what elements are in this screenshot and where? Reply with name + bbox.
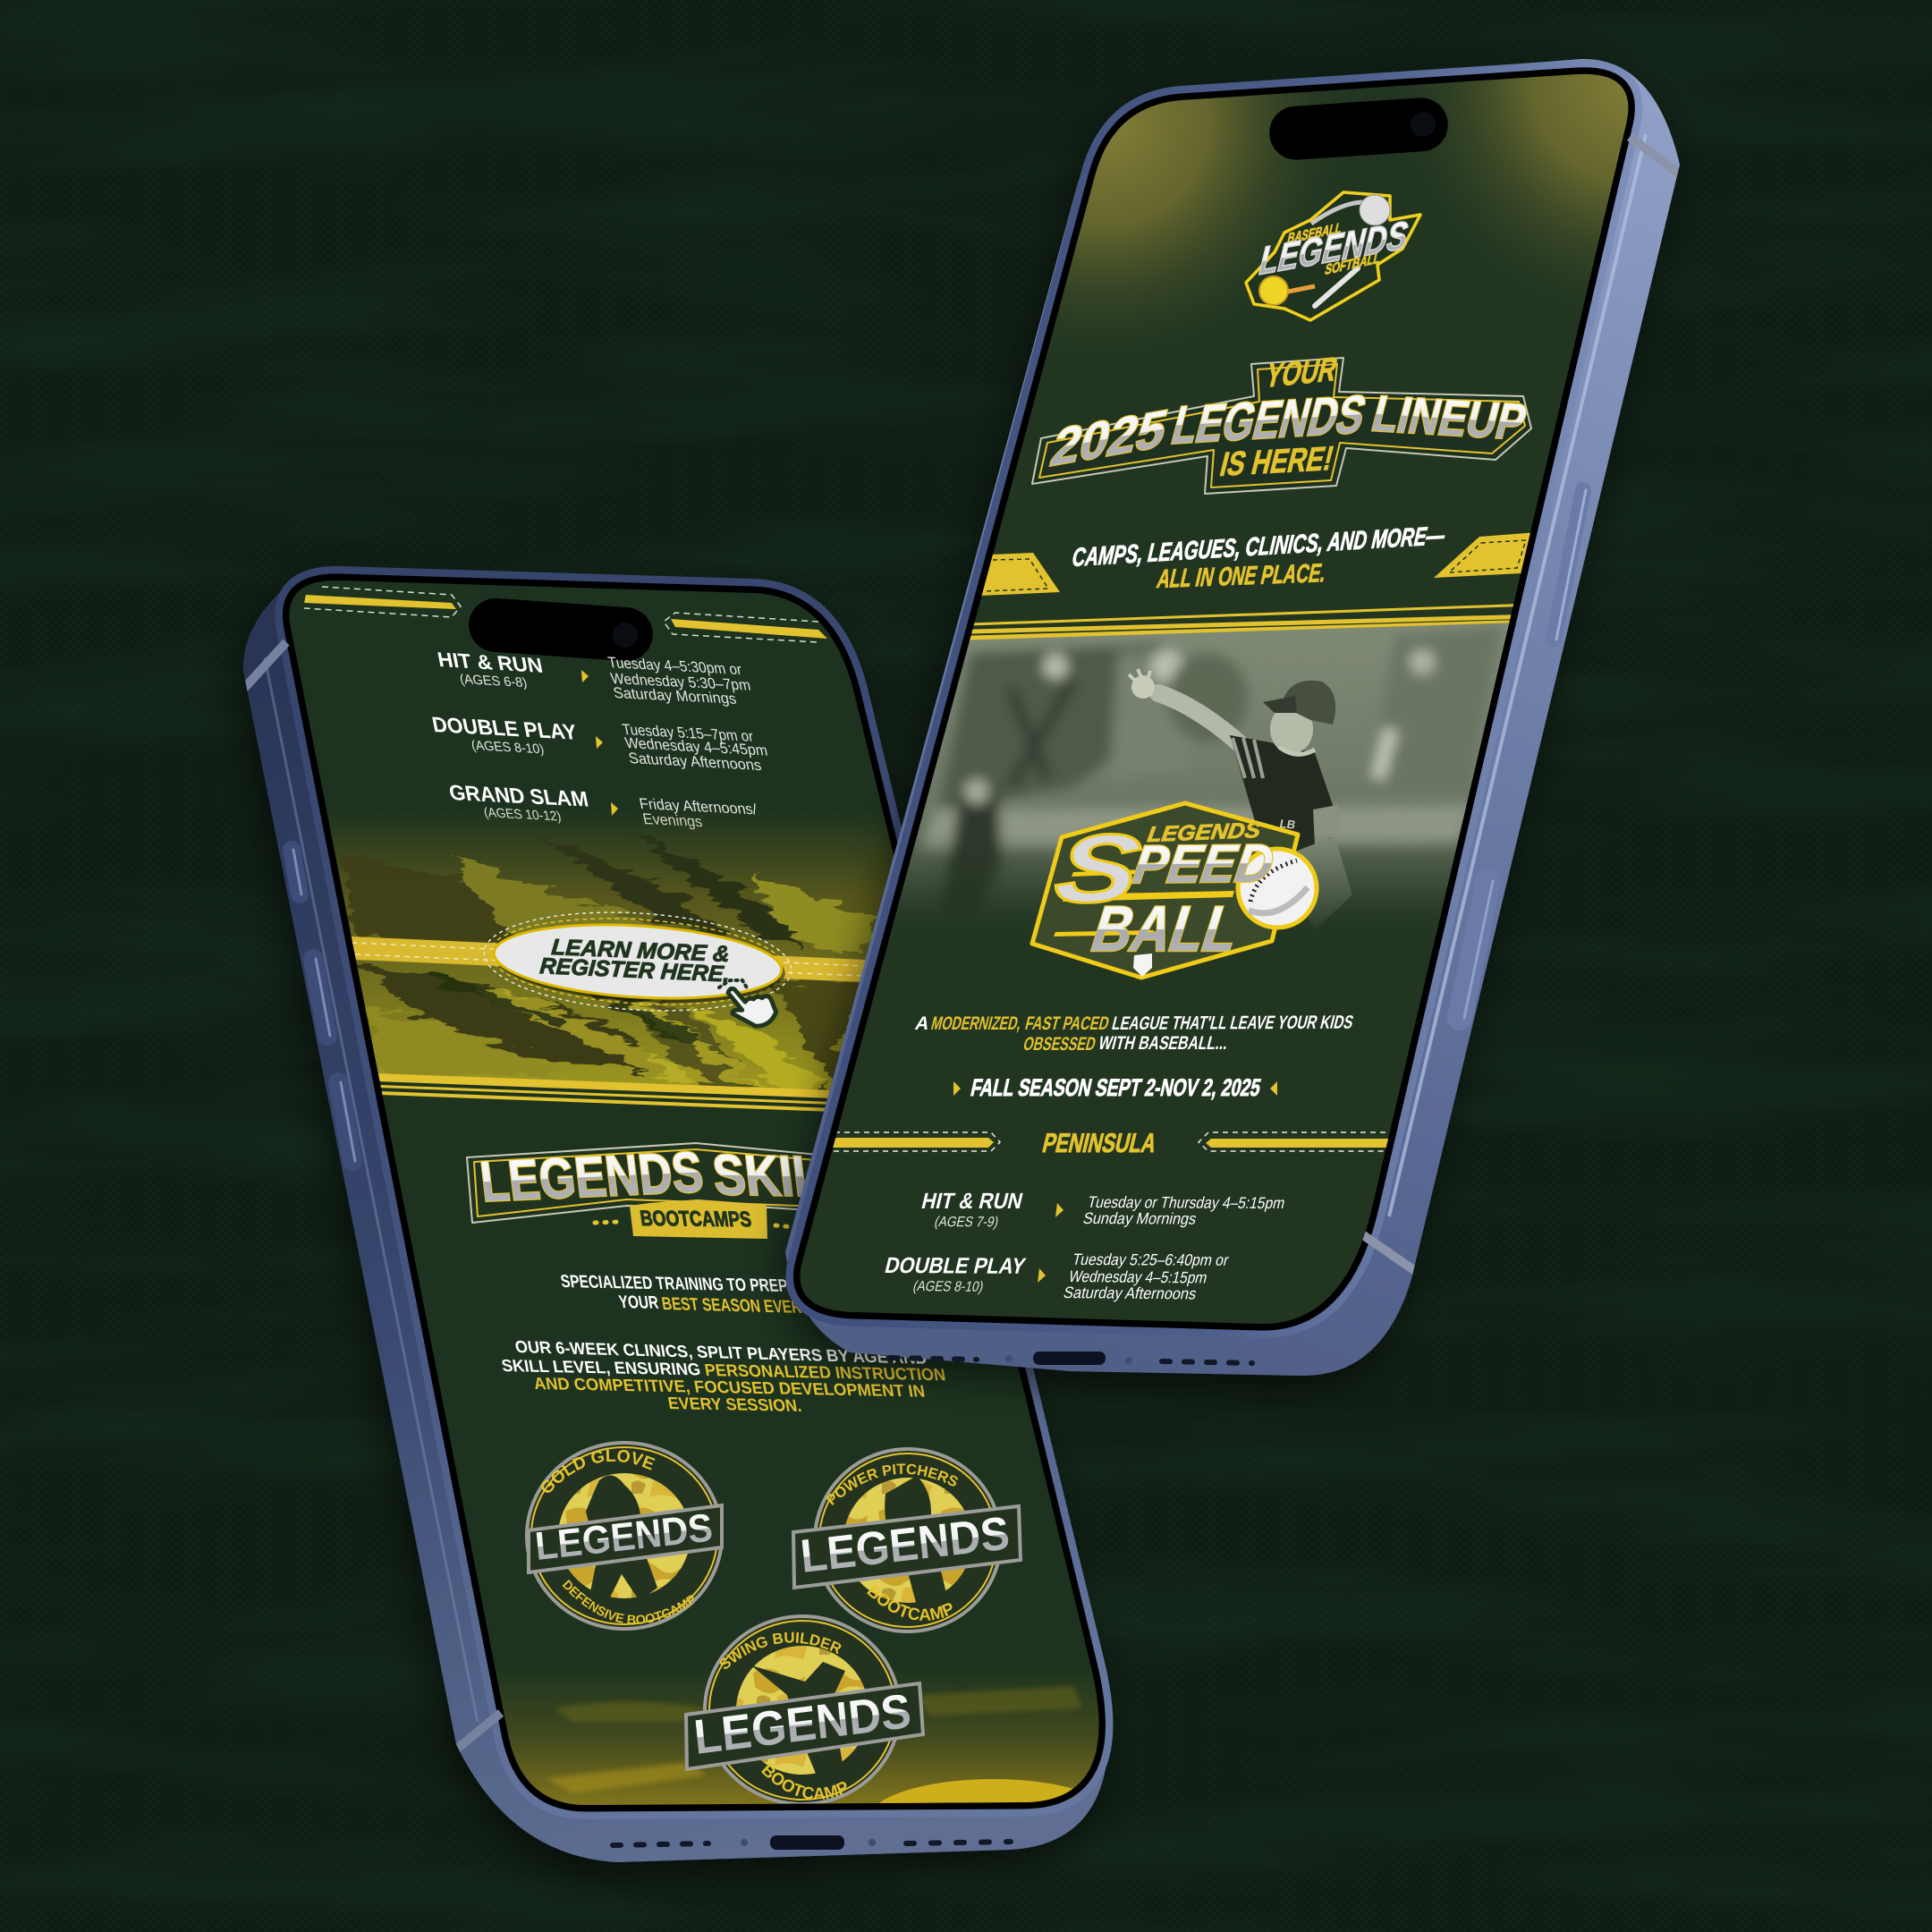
- section divider: peninsula: PENINSULA: [1039, 1128, 1159, 1158]
- ports: left speaker grille and USB-C: [613, 1835, 1011, 1850]
- heading badge: legends skills bootcamps: SKILLS: [709, 1142, 887, 1210]
- yellow stitched band: [351, 936, 866, 982]
- badge: swing builder: BOOTCAMP: [761, 1764, 846, 1800]
- badge: power pitchers: BOOTCAMP: [867, 1585, 952, 1621]
- text: clinics paragraph: PERSONALIZED INSTRUCTION: [703, 1361, 947, 1385]
- tagline: ALL IN ONE PLACE.: [1156, 559, 1326, 594]
- schedule row: grand slam: Evenings: [641, 809, 704, 830]
- heading badge: 2025 legends lineup: LINEUP: [1367, 386, 1532, 451]
- text: clinics paragraph: OUR 6-WEEK CLINICS, SPLIT PLAYERS BY AGE AND: [513, 1338, 928, 1368]
- icon: click dots: [719, 980, 748, 989]
- badge: swing builder: LEGENDS: [691, 1683, 913, 1765]
- heading badge: 2025 legends lineup: 2025: [1045, 398, 1174, 479]
- baseball: [1238, 849, 1317, 928]
- schedule row: grand slam: [450, 785, 755, 830]
- schedule row: double play: [883, 1250, 1231, 1302]
- phone body: right: [785, 59, 1680, 1376]
- schedule row: grand slam: Friday Afternoons/: [638, 794, 758, 818]
- badge: swing builder: [684, 1614, 925, 1804]
- notch: right: [1267, 96, 1450, 162]
- heading badge: 2025 legends lineup: IS HERE!: [1216, 440, 1337, 484]
- text: clinics paragraph: [500, 1338, 947, 1416]
- schedule row: hit and run: [919, 1189, 1287, 1230]
- text: modernized league description: FAST PACED: [1023, 1013, 1112, 1034]
- text: modernized league description: [913, 1012, 1356, 1055]
- heading badge: legends skills bootcamps: [466, 1142, 812, 1239]
- text: modernized league description: LEAGUE THAT'LL LEAVE YOUR KIDS: [1110, 1012, 1356, 1034]
- yellow divider stripes: [957, 604, 1521, 642]
- text: clinics paragraph: SKILL LEVEL, ENSURING: [500, 1357, 702, 1379]
- logo: speedball badge: [1032, 803, 1317, 978]
- text: clinics paragraph: AND COMPETITIVE, FOCUSED DEVELOPMENT IN: [532, 1375, 927, 1402]
- text: specialized training: BEST SEASON EVER: [660, 1294, 803, 1318]
- badge: gold glove: DEFENSIVE BOOTCAMP: [562, 1580, 694, 1624]
- schedule row: hit and run: HIT & RUN: [436, 648, 545, 677]
- yellow divider stripes: [376, 1073, 859, 1113]
- badge: gold glove: LEGENDS: [533, 1505, 715, 1569]
- learn more oval button: LEARN MORE &: [551, 935, 731, 967]
- text: fall season dates: FALL SEASON SEPT 2-NOV 2, 2025: [969, 1073, 1263, 1101]
- tagline: CAMPS, LEAGUES, CLINICS, AND MORE—: [1071, 521, 1446, 572]
- schedule row: hit and run: Saturday Mornings: [612, 683, 738, 708]
- side buttons: left: [292, 850, 355, 1161]
- schedule row: grand slam: (AGES 10-12): [482, 805, 563, 825]
- paint brush background panel: [329, 813, 894, 1090]
- schedule row: double play: Wednesday 4–5:15pm: [1067, 1267, 1209, 1286]
- logo: baseball softball legends: LEGENDS: [1258, 214, 1410, 284]
- schedule row: hit and run: (AGES 7-9): [933, 1214, 1000, 1230]
- schedule row: double play: (AGES 8-10): [470, 738, 546, 757]
- screen: right: [778, 54, 1664, 1333]
- schedule row: double play: Saturday Afternoons: [627, 749, 763, 774]
- text: modernized league description: OBSESSED: [1021, 1033, 1098, 1055]
- photo: pitcher in duotone: [868, 617, 1530, 948]
- logo: speedball badge: S: [1048, 815, 1147, 924]
- text: modernized league description: WITH BASEBALL...: [1097, 1032, 1231, 1054]
- schedule row: hit and run: Sunday Mornings: [1081, 1208, 1199, 1228]
- photo backdrop: [921, 626, 1503, 921]
- heading badge: legends skills bootcamps: LEGENDS: [477, 1140, 707, 1214]
- text: specialized training: SPECIALIZED TRAINING TO PREPARE FOR: [559, 1272, 851, 1297]
- pitcher figure: [1129, 669, 1352, 930]
- schedule row: double play: Wednesday 4–5:45pm: [623, 733, 769, 759]
- schedule row: hit and run: Tuesday 4–5:30pm or: [606, 653, 743, 678]
- ports: right speaker grille and USB-C: [890, 1352, 1252, 1365]
- badge: gold glove: GOLD GLOVE: [541, 1449, 655, 1493]
- learn more oval button: REGISTER HERE.: [539, 953, 731, 987]
- text: modernized league description: A: [913, 1013, 932, 1034]
- learn more oval button: [483, 911, 792, 1012]
- tagline: [1071, 521, 1446, 594]
- schedule row: double play: DOUBLE PLAY: [430, 713, 579, 745]
- label: bootcamps tab: [630, 1199, 767, 1239]
- schedule row: double play: Tuesday 5:25–6:40pm or: [1071, 1250, 1231, 1269]
- text: modernized league description: MODERNIZED,: [929, 1013, 1024, 1034]
- tab: right yellow stitched: [1434, 532, 1538, 578]
- heading badge: 2025 legends lineup: LEGENDS: [1166, 384, 1372, 455]
- schedule row: double play: [432, 717, 767, 771]
- antenna bands: right: [1360, 137, 1686, 1275]
- logo: speedball badge: BALL: [1089, 893, 1242, 965]
- logo: baseball softball legends: BASEBALL: [1287, 220, 1342, 247]
- text: clinics paragraph: EVERY SESSION.: [666, 1394, 803, 1416]
- badge: power pitchers: POWER PITCHERS: [826, 1463, 958, 1505]
- schedule row: double play: Tuesday 5:15–7pm or: [621, 720, 755, 745]
- phone body: left: [243, 572, 1109, 1862]
- schedule row: hit and run: Wednesday 5:30–7pm: [609, 669, 752, 694]
- badge: power pitchers: LEGENDS: [798, 1507, 1012, 1583]
- schedule row: hit and run: (AGES 6-8): [458, 672, 529, 691]
- schedule row: double play: (AGES 8-10): [911, 1278, 985, 1295]
- label: bootcamps tab: BOOTCAMPS: [639, 1207, 753, 1232]
- phone rim and bezel: left: [265, 580, 1098, 1805]
- schedule row: grand slam: GRAND SLAM: [447, 781, 590, 812]
- text: specialized training: YOUR: [617, 1292, 660, 1313]
- schedule row: double play: DOUBLE PLAY: [883, 1253, 1028, 1279]
- section divider: peninsula: [805, 1128, 1395, 1158]
- badge: swing builder: SWING BUILDER: [719, 1631, 841, 1669]
- stadium background at bottom: [429, 1664, 1163, 1861]
- logo: speedball badge: LEGENDS: [1146, 818, 1262, 847]
- heading badge: 2025 legends lineup: [1032, 351, 1532, 494]
- phone: right mockup with speedball screen: [778, 54, 1686, 1376]
- logo: baseball softball legends: SOFTBALL: [1325, 250, 1380, 278]
- side buttons: right: [1460, 490, 1586, 1018]
- home plate: [1133, 953, 1152, 977]
- screen: left: [290, 580, 1098, 1805]
- pitcher figure: LB: [1278, 817, 1297, 832]
- schedule row: double play: Saturday Afternoons: [1062, 1283, 1199, 1302]
- antenna bands: left: [240, 642, 501, 1753]
- stitched divider bars at top: [304, 587, 827, 642]
- schedule row: hit and run: Tuesday or Thursday 4–5:15pm: [1086, 1192, 1287, 1212]
- phone: left mockup with bootcamps screen: [234, 565, 1113, 1877]
- badge: gold glove: [525, 1441, 724, 1631]
- icon: pointing hand cursor: [726, 986, 778, 1029]
- phone rim and bezel: right: [800, 74, 1646, 1324]
- heading badge: 2025 legends lineup: YOUR: [1262, 351, 1341, 395]
- logo: baseball softball legends: [1246, 192, 1420, 320]
- text: specialized training: [559, 1272, 851, 1318]
- notch: left: [467, 597, 655, 663]
- schedule row: hit and run: HIT & RUN: [919, 1189, 1025, 1214]
- badge: power pitchers: [792, 1447, 1023, 1633]
- tab: left yellow stitched: [979, 553, 1060, 596]
- schedule row: hit and run: [436, 648, 752, 708]
- logo: speedball badge: PEED: [1130, 833, 1277, 894]
- speed lines: [1054, 869, 1234, 936]
